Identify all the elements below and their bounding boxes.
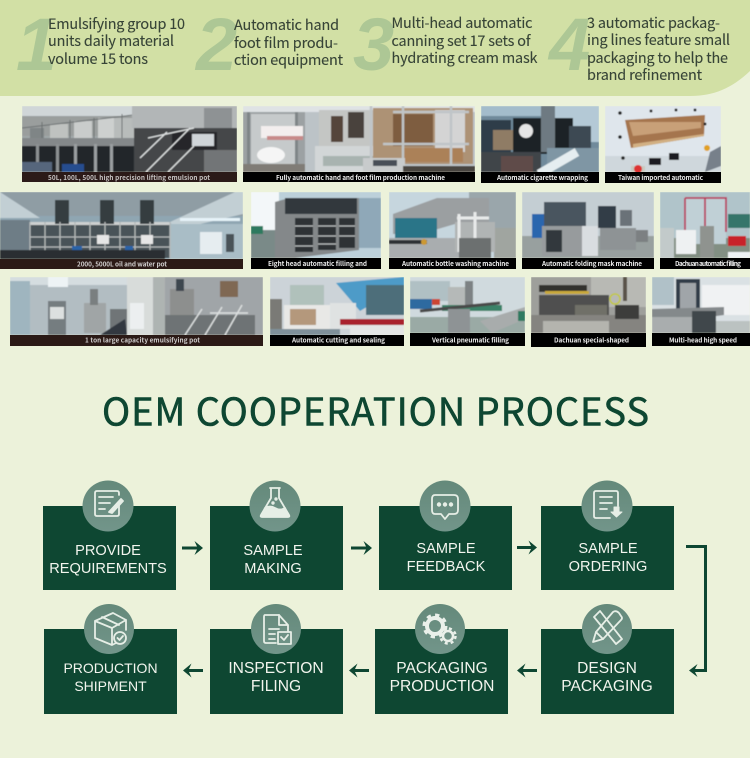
icon: flask bbox=[261, 488, 289, 517]
feature 4: packaging lines: packaging to help the bbox=[587, 47, 728, 68]
step: production shipment: SHIPMENT bbox=[74, 678, 147, 694]
caption: Multi-head high speed bbox=[669, 336, 737, 344]
step: provide requirements: PROVIDE bbox=[75, 543, 141, 559]
caption: Dachuan special-shaped bbox=[554, 336, 629, 344]
photo: hand and foot film machine bbox=[243, 106, 475, 182]
arrow 1 to 2 bbox=[182, 541, 203, 555]
photo: folding mask machine bbox=[522, 192, 654, 269]
icon: box with check bbox=[95, 613, 126, 645]
caption: Automatic cutting and sealing bbox=[291, 336, 385, 344]
feature 1: emulsifying group: volume 15 tons bbox=[48, 48, 148, 69]
feature 3: canning set: Multi-head automatic bbox=[392, 12, 532, 33]
step: sample making: SAMPLE bbox=[243, 543, 303, 559]
caption: Dachuan automatic filling bbox=[675, 259, 741, 268]
feature 4: packaging lines: 4 bbox=[547, 3, 590, 86]
arrow 7 to 8 bbox=[183, 664, 203, 678]
photo: high precision emulsion pot bbox=[22, 106, 237, 182]
feature 4: packaging lines: 3 automatic packag- bbox=[587, 12, 720, 33]
feature 2: hand foot film equipment: ction equipment bbox=[234, 49, 344, 70]
feature 1: emulsifying group: Emulsifying group 10 bbox=[48, 13, 185, 34]
photo: multi-head high speed bbox=[652, 277, 750, 346]
caption: 1 ton large capacity emulsifying pot bbox=[85, 336, 200, 344]
step: provide requirements bbox=[43, 480, 176, 590]
photo: Taiwan imported automatic bbox=[605, 106, 721, 183]
caption: Automatic folding mask machine bbox=[541, 259, 642, 268]
step: sample feedback: SAMPLE bbox=[416, 541, 476, 557]
arrow 6 to 7 bbox=[349, 664, 369, 678]
step: packaging production: PRODUCTION bbox=[390, 678, 494, 695]
icon: speech bubble bbox=[432, 495, 458, 519]
step: design packaging: PACKAGING bbox=[561, 678, 653, 695]
icon: pencil and ruler bbox=[593, 611, 622, 644]
feature 3: canning set: canning set 17 sets of bbox=[392, 30, 532, 51]
step: sample ordering bbox=[541, 480, 674, 590]
feature 2: hand foot film equipment: Automatic hand bbox=[234, 14, 339, 35]
step: production shipment: PRODUCTION bbox=[63, 660, 158, 676]
photo: bottle washing machine bbox=[389, 192, 516, 269]
feature 1: emulsifying group: 1 bbox=[16, 3, 57, 86]
step: sample feedback: FEEDBACK bbox=[407, 559, 486, 575]
step: design packaging bbox=[541, 604, 674, 714]
icon: document with check bbox=[264, 615, 291, 644]
icon: document with down arrow bbox=[594, 491, 622, 518]
step: sample feedback bbox=[379, 480, 512, 590]
feature 2: hand foot film equipment bbox=[194, 3, 344, 86]
step: sample making bbox=[210, 480, 343, 590]
arrow 2 to 3 bbox=[351, 541, 372, 555]
step: inspection filing: INSPECTION bbox=[228, 660, 324, 677]
icon: gears bbox=[424, 615, 456, 644]
feature 4: packaging lines bbox=[547, 3, 730, 86]
step: sample ordering: ORDERING bbox=[569, 559, 647, 575]
feature 4: packaging lines: brand refinement bbox=[587, 64, 703, 85]
photo: vertical pneumatic filling bbox=[410, 277, 525, 346]
top feature band bbox=[0, 0, 750, 96]
photo: cigarette wrapping bbox=[481, 106, 599, 183]
arrow 3 to 4 bbox=[517, 540, 537, 554]
caption: Fully automatic hand and foot film production machine bbox=[276, 173, 445, 182]
photo: large capacity emulsifying pot bbox=[10, 277, 263, 346]
caption: 50L, 100L, 500L high precision lifting emulsion pot bbox=[48, 173, 210, 182]
step: sample ordering: SAMPLE bbox=[578, 541, 638, 557]
feature 2: hand foot film equipment: 2 bbox=[194, 3, 237, 86]
arrow 5 to 6 bbox=[517, 664, 537, 678]
feature 1: emulsifying group: units daily material bbox=[48, 30, 174, 51]
feature 3: canning set: 3 bbox=[353, 3, 394, 86]
photo: Dachuan automatic filling bbox=[660, 192, 750, 269]
caption: Eight head automatic filling and bbox=[268, 259, 367, 268]
icon: document with pencil bbox=[95, 491, 123, 516]
feature 2: hand foot film equipment: foot film produ- bbox=[234, 32, 338, 53]
step: packaging production bbox=[375, 604, 508, 714]
step: packaging production: PACKAGING bbox=[396, 660, 488, 677]
photo: oil and water pot bbox=[0, 192, 243, 269]
caption: Automatic cigarette wrapping bbox=[496, 173, 588, 182]
step: sample making: MAKING bbox=[244, 561, 302, 577]
feature 3: canning set: hydrating cream mask bbox=[392, 47, 538, 68]
step: provide requirements: REQUIREMENTS bbox=[49, 561, 167, 577]
photo: automatic cutting and sealing bbox=[270, 277, 404, 346]
title: OEM COOPERATION PROCESS bbox=[102, 382, 649, 436]
caption: Automatic bottle washing machine bbox=[401, 259, 509, 268]
feature 1: emulsifying group bbox=[16, 3, 185, 86]
step: inspection filing: FILING bbox=[251, 678, 301, 695]
connector arrow: row 1 to row 2 bbox=[686, 545, 707, 677]
step: production shipment bbox=[44, 604, 177, 714]
feature 4: packaging lines: ing lines feature small bbox=[587, 29, 730, 50]
caption: Vertical pneumatic filling bbox=[431, 336, 509, 344]
photo: eight head filling bbox=[251, 192, 381, 269]
caption: 2000, 5000L oil and water pot bbox=[77, 260, 167, 268]
step: design packaging: DESIGN bbox=[577, 660, 637, 677]
caption: Taiwan imported automatic bbox=[618, 173, 704, 182]
photo: Dachuan special-shaped bbox=[531, 277, 646, 347]
step: inspection filing bbox=[210, 604, 343, 714]
feature 3: canning set bbox=[353, 3, 538, 86]
